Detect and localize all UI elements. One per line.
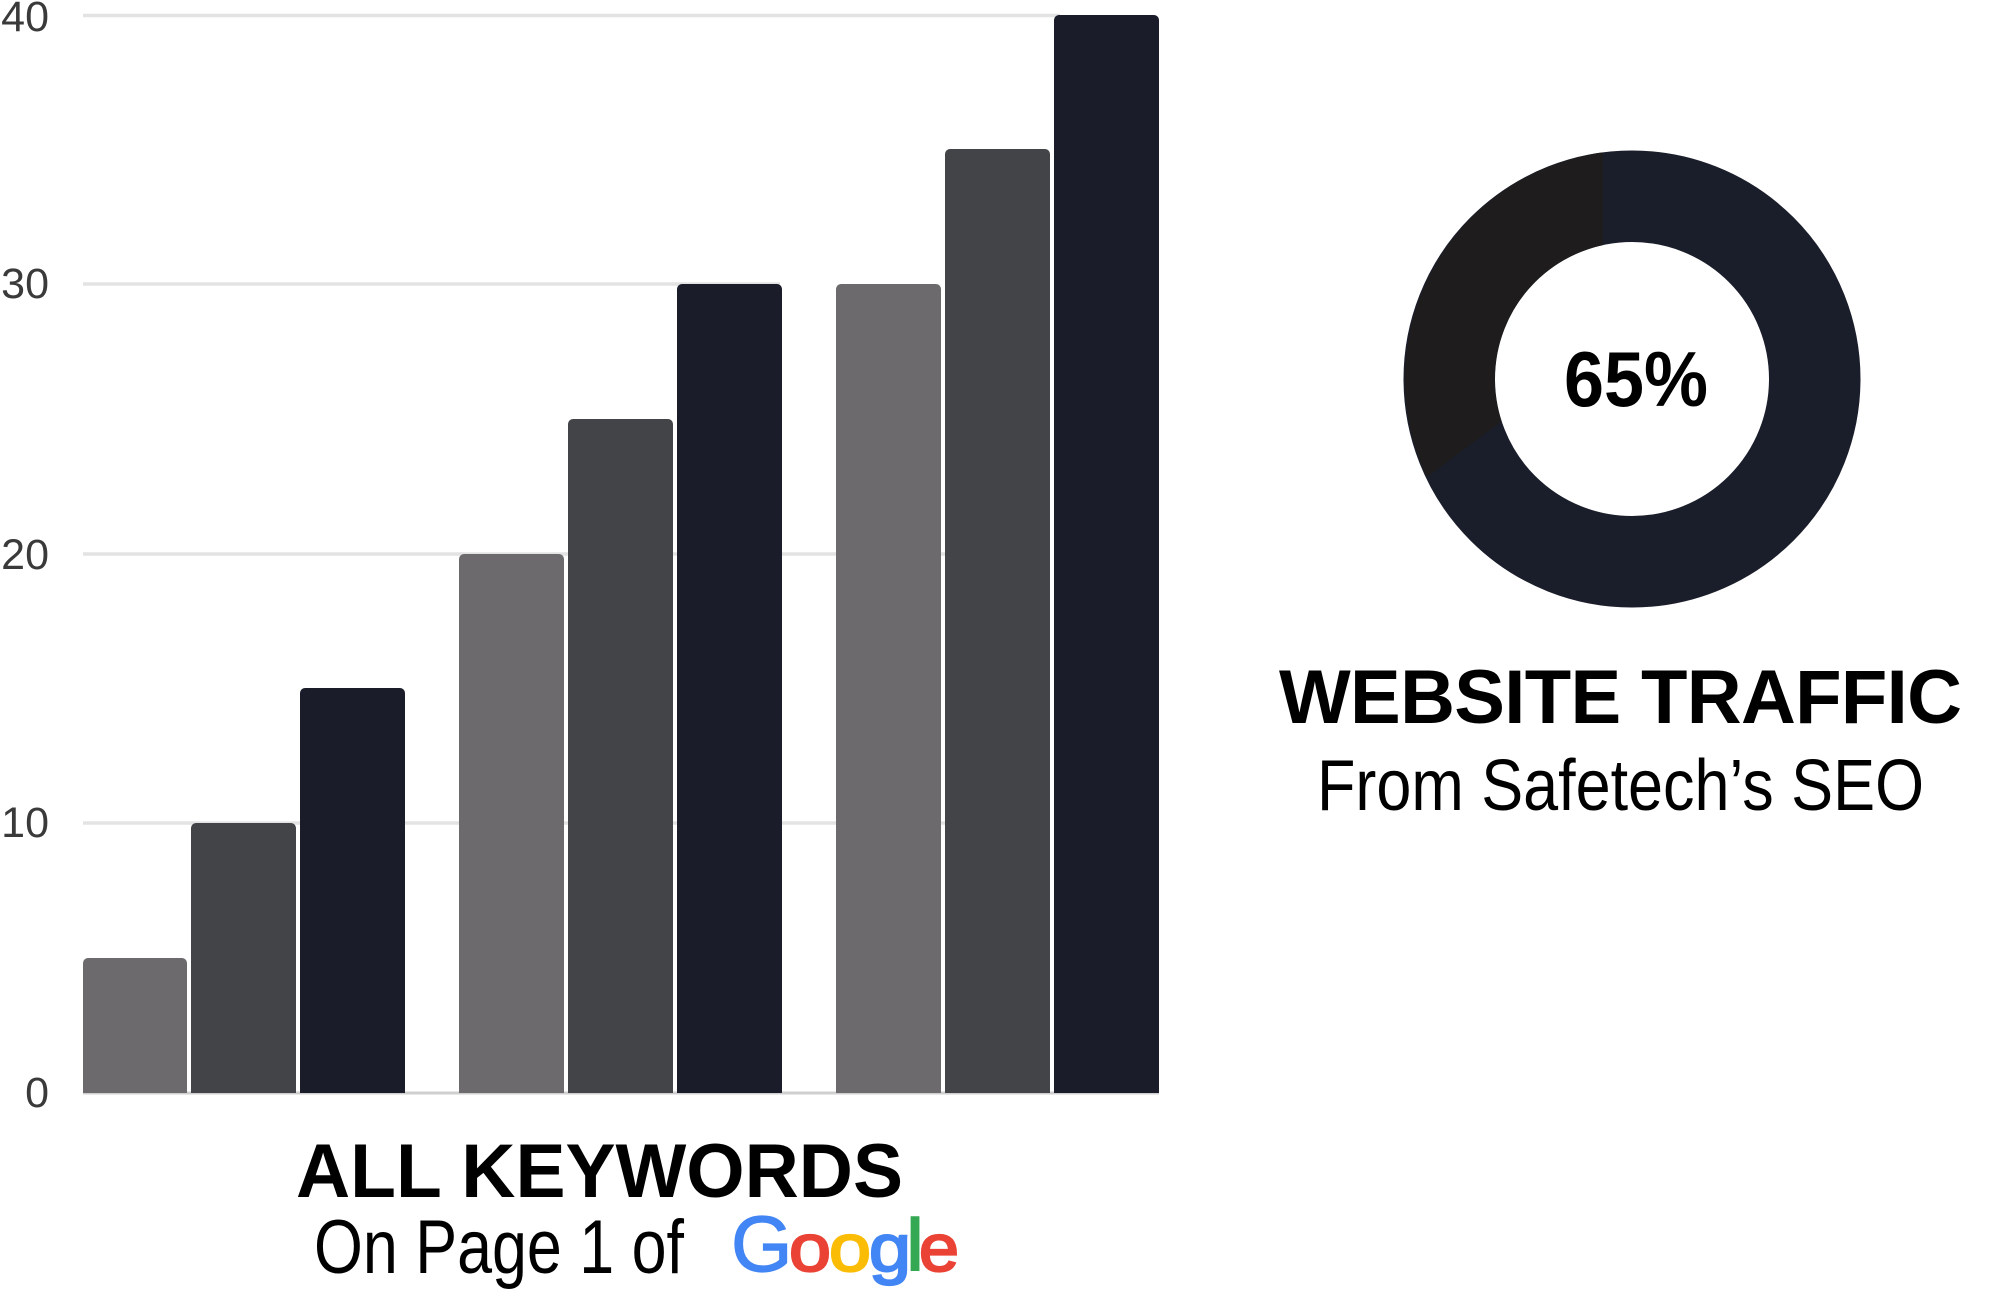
y-axis labels: 20 bbox=[1, 531, 49, 579]
subheading: on page 1 of: On Page 1 of bbox=[314, 1205, 685, 1290]
donut value: 65% bbox=[1564, 335, 1708, 423]
y-axis labels: 10 bbox=[1, 799, 49, 847]
y-axis labels: 0 bbox=[25, 1069, 49, 1117]
icon: google logo: G bbox=[731, 1199, 792, 1288]
icon: google logo: o bbox=[789, 1211, 831, 1286]
subheading: from safetech's seo: From Safetech’s SEO bbox=[1317, 746, 1924, 826]
icon: google logo: g bbox=[869, 1211, 911, 1286]
bar group 2 bbox=[459, 284, 782, 1093]
y-axis labels: 30 bbox=[1, 260, 49, 308]
bar group 3 bbox=[836, 15, 1159, 1093]
donut chart: website traffic bbox=[1405, 152, 1815, 562]
bar group 1 bbox=[83, 688, 405, 1093]
icon: google logo: o bbox=[829, 1211, 871, 1286]
heading: website traffic: WEBSITE TRAFFIC bbox=[1279, 655, 1962, 740]
heading: all keywords: ALL KEYWORDS bbox=[296, 1129, 903, 1214]
icon: google logo: l bbox=[906, 1205, 924, 1286]
bar chart: all keywords bbox=[1, 0, 1159, 1117]
icon: google logo bbox=[731, 1199, 959, 1288]
y-axis labels bbox=[1, 0, 49, 1117]
icon: google logo: e bbox=[919, 1211, 959, 1286]
